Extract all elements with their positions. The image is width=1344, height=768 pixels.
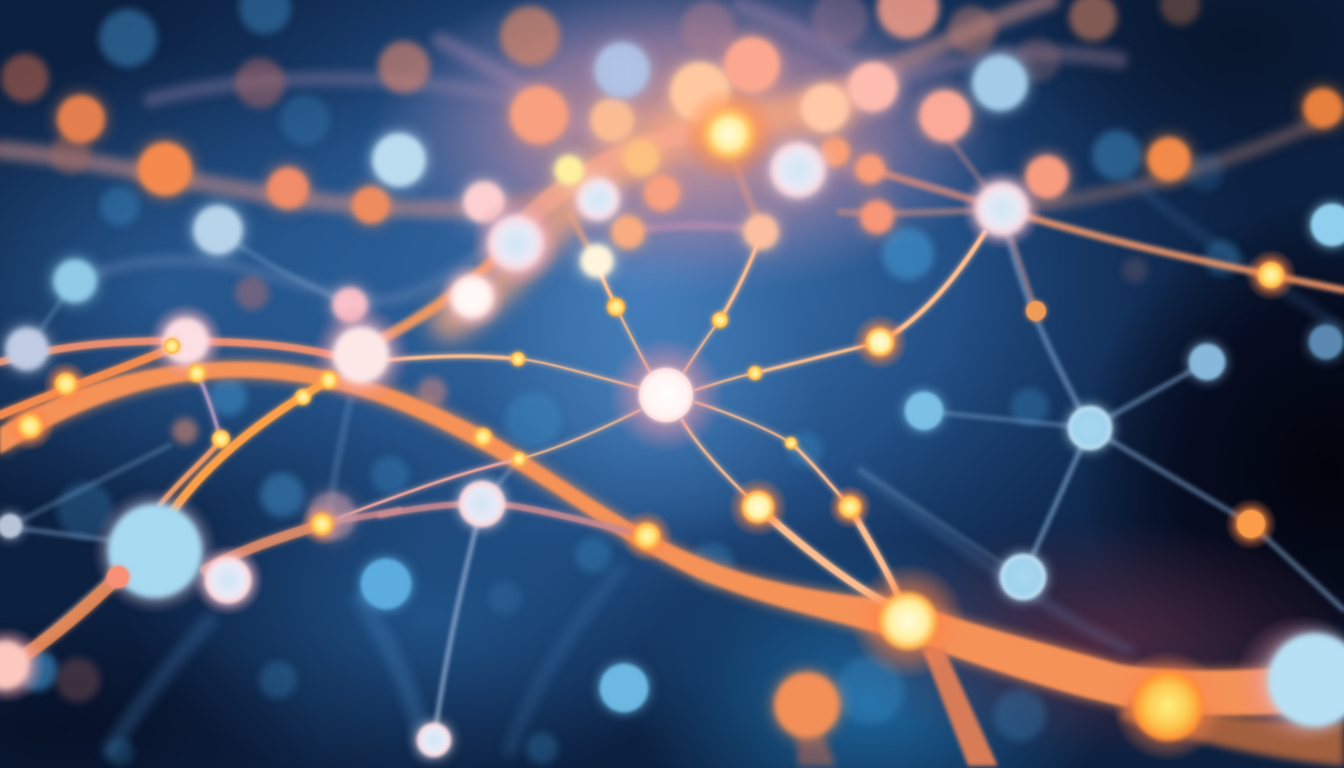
blue-white nodes [6,43,1028,540]
upper pink strands [360,105,1344,350]
soft golden nodes at top [555,110,753,184]
descending orange strands [922,648,998,766]
left orange strands [0,341,647,672]
lower right strand [1120,700,1344,766]
bright golden synapses [18,262,1284,588]
sharper blue nodes [0,204,1344,757]
main thick orange strand [0,362,1300,715]
faded strand below orange node [796,730,836,766]
large soft nodes [0,505,1344,726]
large golden hubs [879,592,1203,741]
thin blue network links [0,209,1344,740]
central neuron branches [322,232,985,605]
central neuron body [639,368,693,422]
